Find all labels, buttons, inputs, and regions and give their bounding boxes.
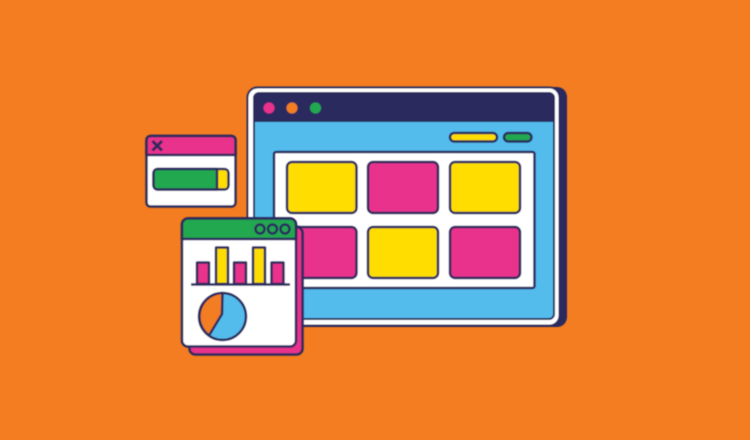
yellow tile, row 1 right — [450, 162, 520, 213]
chart window header — [182, 218, 296, 239]
browser shadow — [252, 87, 567, 327]
chart window body — [182, 218, 296, 346]
progress bar track — [154, 169, 228, 190]
panel: main browser window — [248, 87, 567, 327]
browser content area — [254, 93, 554, 319]
icon: pink window dot — [264, 102, 274, 114]
pink tile, row 1 — [368, 162, 438, 213]
icon: header circles — [256, 224, 290, 234]
yellow tile, row 2 — [368, 227, 438, 278]
green pill button — [504, 133, 532, 142]
browser frame — [248, 88, 560, 326]
yellow pill button — [450, 133, 497, 142]
panel: small progress window — [146, 136, 236, 206]
chart window pink shadow — [190, 227, 302, 354]
icon: green window dot — [310, 102, 321, 114]
panel: chart window — [182, 218, 302, 354]
progress bar — [154, 169, 228, 190]
content grid panel — [274, 152, 534, 288]
pink tile, row 2 right — [450, 227, 520, 278]
progress window body — [146, 136, 236, 206]
pie chart — [199, 293, 246, 340]
pink tile, row 2 — [287, 227, 356, 278]
icon: orange window dot — [286, 102, 298, 114]
icon: close cross — [152, 141, 162, 150]
bar chart — [191, 248, 290, 284]
yellow tile, row 1 — [287, 162, 356, 213]
browser title bar — [254, 93, 554, 122]
progress bar fill — [154, 169, 217, 190]
progress window header — [146, 136, 236, 155]
